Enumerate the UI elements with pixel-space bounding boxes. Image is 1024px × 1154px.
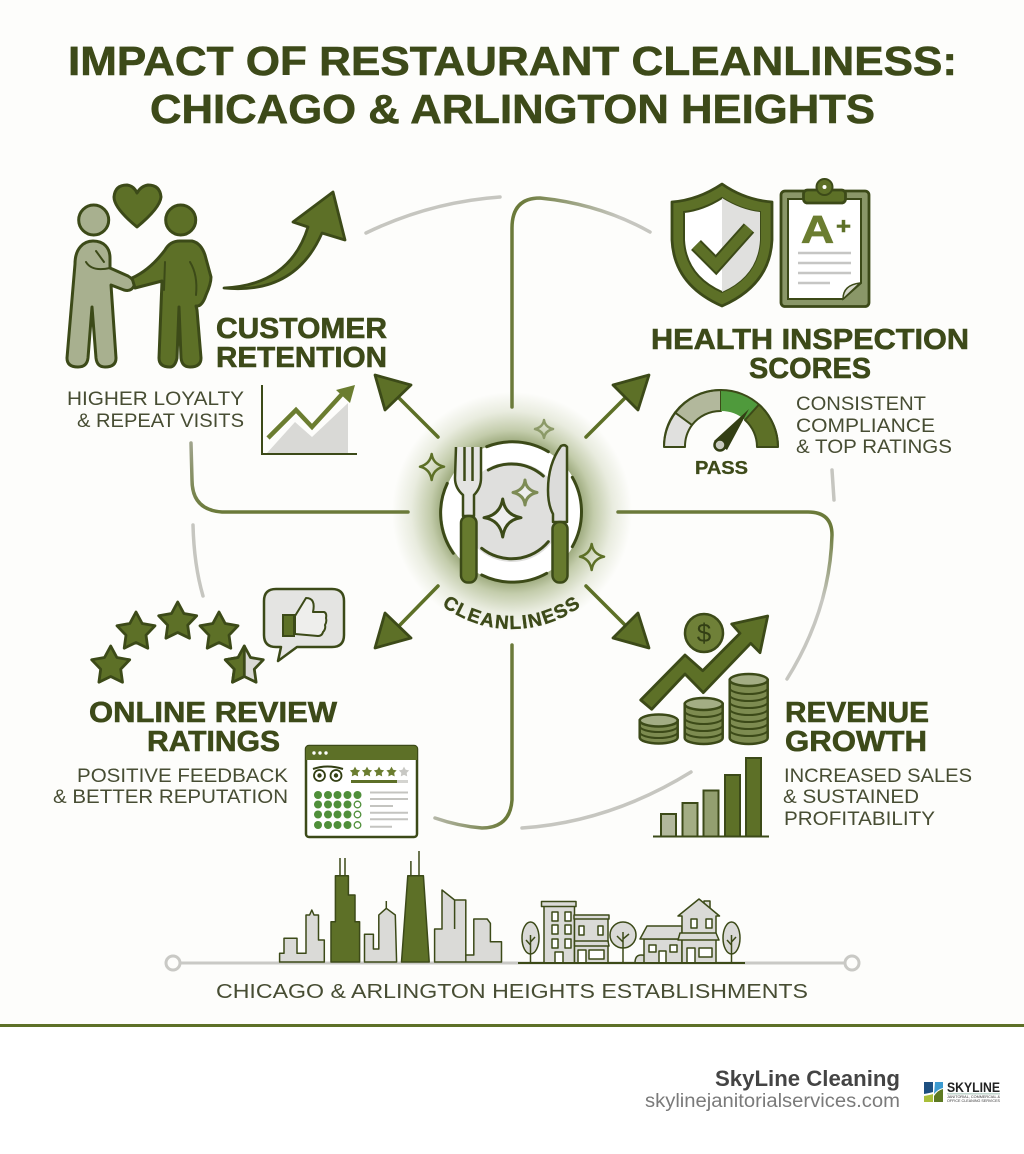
panel: health inspection scores bbox=[651, 179, 969, 478]
icon: dollar coin: $ bbox=[697, 618, 712, 648]
heading bbox=[651, 324, 969, 385]
description: HIGHER LOYALTY bbox=[67, 388, 244, 410]
icon: thumbs up bubble bbox=[264, 589, 344, 661]
label: cleanliness: CLEANLINESS bbox=[444, 596, 580, 630]
heading: HEALTH INSPECTION bbox=[651, 324, 969, 356]
logo: SKYLINE bbox=[947, 1080, 1000, 1095]
icon: gauge bbox=[664, 390, 778, 450]
icon: dollar coin bbox=[685, 614, 723, 652]
icon: review window bbox=[306, 746, 417, 837]
description: & SUSTAINED bbox=[783, 786, 919, 808]
icon: stars bbox=[92, 602, 263, 682]
heading bbox=[89, 697, 338, 758]
icon: chicago skyline bbox=[280, 851, 502, 962]
heading bbox=[785, 697, 929, 758]
title bbox=[68, 38, 957, 132]
panel: revenue growth bbox=[640, 614, 972, 836]
timeline bar bbox=[166, 956, 859, 970]
radial arrows bbox=[375, 375, 649, 648]
heading: REVENUE bbox=[785, 697, 929, 729]
description: & REPEAT VISITS bbox=[77, 410, 244, 432]
panel: skyline and location bbox=[166, 851, 859, 1003]
title: IMPACT OF RESTAURANT CLEANLINESS: bbox=[68, 38, 957, 84]
heading: GROWTH bbox=[785, 726, 927, 758]
icon: clipboard bbox=[781, 179, 869, 306]
panel: online review ratings bbox=[53, 589, 417, 837]
icon: shield bbox=[672, 184, 772, 306]
icon: clipboard: A bbox=[801, 209, 834, 252]
description bbox=[783, 765, 972, 830]
icon: zigzag growth arrow bbox=[641, 616, 768, 709]
chart: bar chart bbox=[653, 758, 769, 836]
logo bbox=[924, 1080, 1000, 1103]
title: CHICAGO & ARLINGTON HEIGHTS bbox=[150, 86, 875, 132]
heading bbox=[216, 313, 387, 374]
description: & TOP RATINGS bbox=[796, 436, 952, 458]
description: CONSISTENT bbox=[796, 393, 926, 415]
icon: arlington heights houses bbox=[518, 899, 745, 963]
description: PROFITABILITY bbox=[784, 808, 935, 830]
brand name: SkyLine Cleaning bbox=[715, 1066, 900, 1091]
description: INCREASED SALES bbox=[784, 765, 972, 787]
chart: small trend bbox=[262, 385, 357, 454]
icon: coin stacks bbox=[640, 674, 768, 744]
footer bbox=[0, 1024, 1024, 1112]
description: POSITIVE FEEDBACK bbox=[77, 765, 288, 787]
sparkles bbox=[420, 420, 604, 570]
description bbox=[53, 765, 288, 808]
heading: RETENTION bbox=[216, 342, 387, 374]
description: & BETTER REPUTATION bbox=[53, 786, 288, 808]
caption: CHICAGO & ARLINGTON HEIGHTS ESTABLISHMENTS bbox=[216, 981, 808, 1003]
glow behind plate bbox=[392, 392, 632, 632]
website: skylinejanitorialservices.com bbox=[645, 1091, 900, 1112]
logo: JANITORIAL, COMMERCIAL & bbox=[947, 1095, 1000, 1099]
description bbox=[67, 388, 244, 432]
logo: OFFICE CLEANING SERVICES bbox=[947, 1099, 1000, 1103]
plate bbox=[441, 442, 582, 582]
heading: SCORES bbox=[749, 353, 871, 385]
connector lines bbox=[191, 197, 834, 828]
icon: growth arrow bbox=[224, 192, 345, 289]
panel: customer retention bbox=[67, 185, 387, 454]
central cleanliness plate bbox=[418, 418, 606, 630]
fork bbox=[455, 447, 481, 582]
icon: handshake people bbox=[67, 185, 211, 367]
description: COMPLIANCE bbox=[796, 415, 935, 437]
heading: ONLINE REVIEW bbox=[89, 697, 338, 729]
description bbox=[796, 393, 952, 458]
heading: CUSTOMER bbox=[216, 313, 387, 345]
heading: RATINGS bbox=[147, 726, 280, 758]
icon: clipboard: + bbox=[836, 213, 851, 239]
label: pass: PASS bbox=[695, 458, 748, 478]
knife bbox=[548, 445, 568, 582]
